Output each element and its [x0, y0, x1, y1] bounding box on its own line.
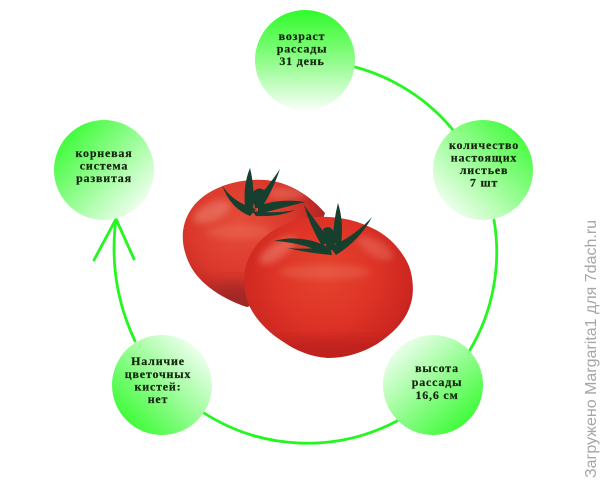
circle: flower clusters: нет	[148, 392, 168, 406]
circle: seedling height	[383, 335, 483, 435]
circle: seedling age: возраст	[279, 29, 325, 43]
circle: seedling age: 31 день	[279, 54, 325, 68]
front tomato	[244, 203, 413, 361]
circle: flower clusters: кистей:	[135, 380, 181, 394]
back tomato calyx	[222, 168, 305, 216]
circle: flower clusters: цветочных	[125, 367, 191, 381]
circle: seedling height: 16,6 см	[415, 388, 459, 402]
circle: seedling height: высота	[415, 361, 459, 375]
circle: flower clusters: Наличие	[131, 354, 185, 368]
circle: root system: корневая	[75, 146, 133, 160]
circle: true leaves count: листьев	[460, 163, 508, 177]
circle: seedling age: рассады	[277, 42, 327, 56]
back tomato	[183, 168, 325, 314]
circle: seedling height: рассады	[412, 375, 462, 389]
front tomato calyx	[274, 203, 372, 255]
circle: true leaves count	[433, 120, 533, 220]
circle: root system: развитая	[76, 171, 132, 185]
circle: true leaves count: настоящих	[451, 150, 517, 164]
cycle arc with arrow	[94, 67, 497, 443]
circle: seedling age	[255, 10, 355, 110]
circle: true leaves count: 7 шт	[470, 176, 498, 190]
circle: root system: система	[80, 158, 128, 172]
circle: root system	[54, 120, 154, 220]
watermark: Загружено Margarita1 для 7dach.ru	[583, 220, 600, 478]
circle: flower clusters	[112, 335, 212, 435]
circle: true leaves count: количество	[449, 138, 519, 152]
